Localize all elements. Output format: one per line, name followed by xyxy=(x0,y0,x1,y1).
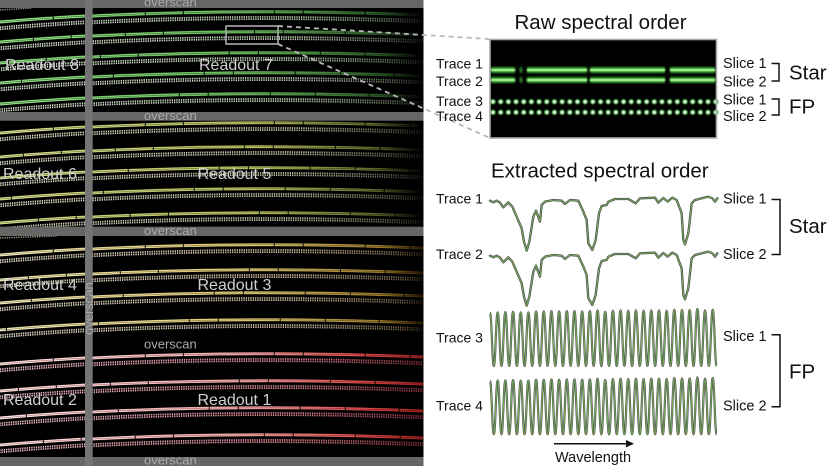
title: extracted spectral order: Extracted spectral order xyxy=(491,160,709,182)
star traces glow xyxy=(491,70,715,80)
raw trace labels: Trace 3 xyxy=(436,93,483,109)
spectral orders: red readouts 1 and 2 xyxy=(0,353,423,452)
overscan labels: overscan xyxy=(144,108,197,123)
title: raw spectral order: Raw spectral order xyxy=(514,11,687,34)
chart: FP comb trace 3 xyxy=(490,309,717,366)
dashed zoom connectors xyxy=(278,26,489,138)
extracted trace labels xyxy=(436,190,483,414)
raw trace labels: Trace 4 xyxy=(436,108,483,124)
zoom box on detector xyxy=(226,26,278,44)
label: star raw: Star xyxy=(789,62,827,84)
star traces core xyxy=(491,70,715,80)
raw trace labels xyxy=(436,55,483,124)
raw trace labels: Trace 1 xyxy=(436,55,483,71)
overscan labels xyxy=(81,0,197,467)
extracted trace labels: Trace 4 xyxy=(436,398,483,414)
readout labels: Readout 2 xyxy=(3,392,77,409)
detector background xyxy=(0,0,424,466)
raw slice labels: Slice 2 xyxy=(723,109,767,125)
overscan labels: overscan xyxy=(81,282,96,335)
chart: star spectrum trace 2 xyxy=(490,252,717,306)
raw slice labels: Slice 1 xyxy=(723,92,767,108)
readout labels: Readout 5 xyxy=(198,166,271,183)
overscan labels: overscan xyxy=(144,336,197,352)
extracted slice labels: Slice 1 xyxy=(723,329,767,345)
label: FP raw: FP xyxy=(789,96,815,118)
readout labels: Readout 4 xyxy=(3,277,77,294)
arrow: wavelength direction xyxy=(554,440,634,447)
label: wavelength: Wavelength xyxy=(555,450,631,466)
FP traces glow xyxy=(493,102,716,112)
raw slice labels: Slice 2 xyxy=(723,75,767,91)
extracted trace labels: Trace 1 xyxy=(436,190,483,206)
readout labels: Readout 8 xyxy=(5,57,79,74)
extracted slice labels: Slice 1 xyxy=(723,191,767,207)
extracted brackets xyxy=(772,200,780,407)
readout labels: Readout 1 xyxy=(198,392,271,409)
FP traces core xyxy=(493,102,716,112)
readout labels: Readout 7 xyxy=(199,57,273,74)
raw slice labels xyxy=(723,56,767,125)
raw trace labels: Trace 2 xyxy=(436,73,483,89)
extracted slice labels: Slice 2 xyxy=(723,247,767,263)
overscan labels: overscan xyxy=(144,223,197,238)
panel: raw spectral order image xyxy=(490,40,716,138)
label: star extracted: Star xyxy=(789,215,827,238)
extracted slice labels: Slice 2 xyxy=(723,399,767,415)
spectral orders: yellow-orange readouts 3 and 4 xyxy=(0,236,423,337)
raw brackets xyxy=(772,64,779,115)
extracted trace labels: Trace 3 xyxy=(436,329,483,345)
panel: detector image xyxy=(0,0,424,467)
extracted trace labels: Trace 2 xyxy=(436,246,483,262)
readout labels: Readout 3 xyxy=(198,277,271,294)
spectral orders: yellow-green readouts 5 and 6 xyxy=(0,122,423,230)
label: FP extracted: FP xyxy=(789,360,815,384)
chart: star spectrum trace 1 xyxy=(490,197,717,251)
raw image background xyxy=(490,40,716,138)
readout labels: Readout 6 xyxy=(3,166,77,183)
spectral orders: green readouts 7 and 8 xyxy=(0,8,423,111)
overscan bands xyxy=(0,0,424,466)
raw image border xyxy=(490,40,716,138)
extracted slice labels xyxy=(723,191,767,415)
chart: FP comb trace 4 xyxy=(490,377,717,434)
readout labels xyxy=(3,57,273,409)
raw slice labels: Slice 1 xyxy=(723,56,767,72)
